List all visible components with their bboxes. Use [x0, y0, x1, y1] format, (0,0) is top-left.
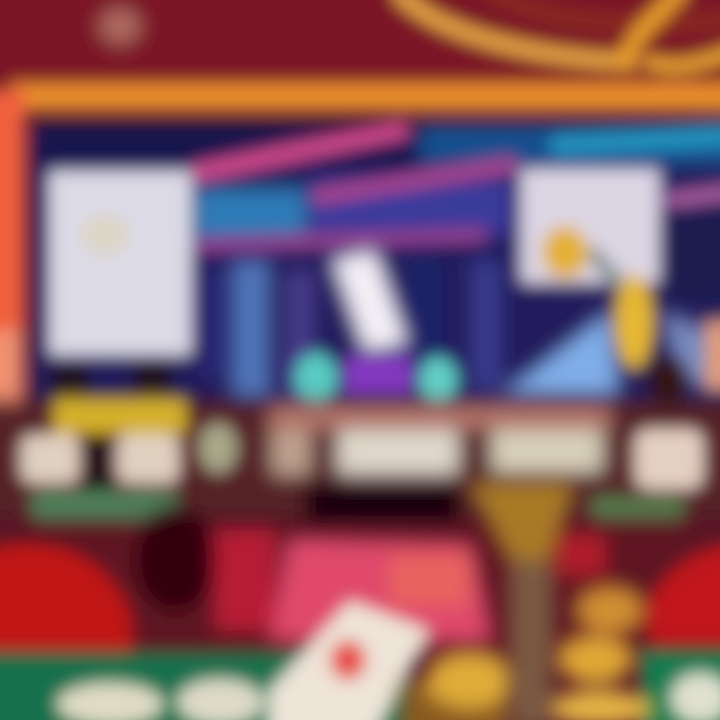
chair: left red seat [0, 544, 132, 655]
machines: slot machine row [0, 402, 720, 526]
chair: right red seat [645, 545, 720, 645]
light beams: pink and blue [200, 130, 720, 245]
stage frame: orange border [0, 82, 720, 420]
panel: left white board [48, 170, 192, 356]
screen: dark blue background [30, 122, 720, 407]
post: brass stand [468, 482, 575, 720]
ceiling: dark red wall [0, 0, 720, 90]
chandelier: gold rings [400, 0, 720, 66]
floor: red and pink carpet [0, 508, 720, 662]
slot machine: right [590, 320, 720, 523]
slot machine: left [20, 360, 238, 524]
columns: stage pillars [205, 260, 720, 400]
table: green felt [0, 650, 720, 720]
panel: right white board [520, 168, 660, 370]
cards: white playing cards [56, 600, 720, 720]
figure: central white shape [330, 248, 410, 354]
chips: gold stacks [400, 586, 654, 720]
console: purple screen and teal lights [294, 352, 458, 404]
